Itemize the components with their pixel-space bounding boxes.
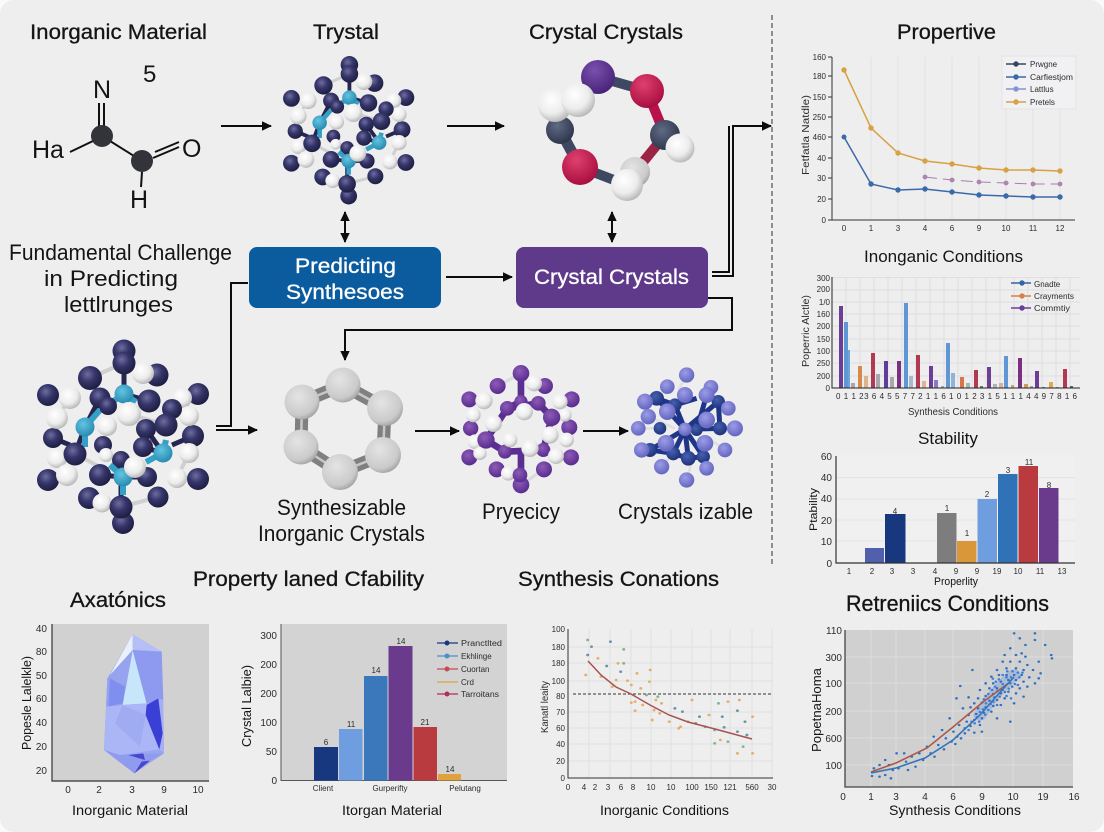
value labels: 11	[1025, 458, 1034, 467]
y axis labels: 110	[826, 626, 842, 637]
scatter points	[586, 640, 753, 753]
y axis labels: 60	[821, 452, 832, 463]
icon: ring molecule	[538, 60, 694, 201]
legend: Crd	[461, 678, 474, 687]
heading: Axatonics: Axatónics	[70, 589, 166, 612]
box: Crystal Crystals: Crystal Crystals	[534, 266, 689, 289]
x axis labels: 0 1 1 23 6 4 5 5 7 7 2 1 1 6 1 0 1 2 3 1 5 1 1 1 4 4 9 7 8 1 6	[836, 392, 1078, 401]
x axis labels	[842, 224, 1065, 233]
crystal shape	[104, 634, 164, 773]
x axis labels: 9	[954, 567, 959, 576]
y axis labels: 10	[821, 537, 832, 548]
icon: grey ring	[284, 368, 403, 490]
y axis labels	[552, 625, 566, 783]
title: Inorganic Material: Inorganic Material	[30, 21, 207, 44]
y axis labels: 160	[817, 310, 831, 319]
value labels	[324, 637, 455, 774]
x axis labels: 6	[950, 792, 956, 803]
legend: Prwgne	[1030, 60, 1058, 69]
y axis labels: 0	[822, 216, 827, 225]
heading: Synthesis Conations: Synthesis Conations	[518, 568, 719, 591]
label: Synthesizable Inorganic Crystals: Synthesizable	[277, 495, 406, 520]
x axis labels: 150	[704, 783, 718, 792]
x axis labels: 0	[566, 783, 571, 792]
x axis labels: 9	[975, 567, 980, 576]
x axis labels: 19	[1037, 792, 1049, 803]
arrow: ring to purple cluster	[415, 430, 459, 432]
x axis labels: 1	[868, 792, 874, 803]
y axis labels: 300	[260, 631, 277, 642]
x axis title: Properlity	[934, 576, 978, 588]
y axis labels: 20	[36, 742, 47, 753]
legend	[1011, 280, 1074, 313]
x axis labels: 16	[1068, 792, 1080, 803]
y axis labels: 60	[556, 724, 566, 733]
y axis labels: 600	[825, 734, 842, 745]
x axis labels: 2	[870, 567, 875, 576]
y axis labels: 200	[817, 372, 831, 381]
box: Predicting Synthesoes: Synthesoes	[286, 281, 404, 304]
x axis labels: 10	[192, 785, 204, 796]
bars	[865, 466, 1058, 563]
y axis labels: 100	[825, 679, 842, 690]
y axis labels	[821, 452, 832, 570]
y axis labels: 80	[556, 692, 566, 701]
arrow: double between trystal and blue box	[344, 212, 346, 242]
x axis labels: 10	[1002, 224, 1011, 233]
scatter chart: Retreniics Conditions	[809, 626, 1080, 818]
title: Stability: Stability	[918, 429, 978, 448]
value labels: 11	[347, 720, 356, 729]
x axis labels: 6	[950, 224, 955, 233]
y axis labels: 150	[817, 335, 831, 344]
y axis title: Kanatl leaity	[540, 681, 551, 733]
x axis labels: 9	[979, 792, 985, 803]
x axis labels: 2	[593, 783, 598, 792]
x axis labels: 2	[96, 785, 102, 796]
x axis title: Synthesis Conditions	[889, 802, 1021, 818]
heading: Retreniics Conditions: Retreniics Conditions	[846, 591, 1049, 616]
x axis labels: 9	[977, 224, 982, 233]
y axis labels: 180	[813, 72, 827, 81]
x axis labels: 30	[768, 783, 777, 792]
x axis title: Inorganic Conditions	[600, 802, 729, 818]
y axis labels: 100	[260, 718, 277, 729]
icon: large teal crystal cluster	[37, 340, 209, 534]
y axis labels: 50	[36, 671, 47, 682]
icon: skeletal molecule	[32, 76, 201, 214]
title: Crystal Crystals: Crystal Crystals	[529, 21, 683, 44]
x axis labels: 0	[65, 785, 71, 796]
y axis labels: 180	[552, 659, 566, 668]
value labels: 8	[1047, 481, 1052, 490]
label: Synthesizable Inorganic Crystals: Inorganic Crystals	[258, 521, 425, 546]
value labels: 14	[446, 765, 455, 774]
trend line: blue	[871, 677, 1014, 773]
arrow: purple box to Propertive	[712, 126, 771, 276]
icon: skeletal molecule: Ha	[32, 136, 64, 164]
x axis labels: 11	[1029, 224, 1038, 233]
x axis labels: 4	[922, 792, 928, 803]
x axis labels: 9	[161, 785, 167, 796]
x axis labels: 1	[847, 567, 852, 576]
value labels: 1	[945, 504, 950, 513]
title: Propertive: Propertive	[897, 21, 996, 44]
y axis labels: 200	[260, 660, 277, 671]
y axis labels: 40	[821, 494, 832, 505]
x axis labels: 3	[890, 567, 895, 576]
x axis title: Synthesis Conditions	[908, 407, 998, 418]
y axis labels: 40	[36, 718, 47, 729]
y axis title: Crystal Lalbie)	[239, 665, 254, 747]
value labels: 1	[965, 529, 970, 538]
x axis labels	[65, 785, 204, 796]
x axis labels	[840, 792, 1080, 803]
y axis labels: 40	[36, 624, 47, 635]
y axis labels: 20	[556, 757, 566, 766]
y axis labels: 60	[36, 694, 47, 705]
y axis labels: 40	[817, 154, 827, 163]
x axis labels: 560	[745, 783, 759, 792]
x axis labels: Pelutang	[449, 784, 481, 793]
y axis labels: 180	[552, 643, 566, 652]
y axis labels: 30	[817, 174, 827, 183]
legend	[1002, 56, 1076, 109]
legend: Crayments	[1034, 292, 1074, 301]
series: blue	[842, 134, 1063, 200]
y axis labels	[825, 626, 842, 772]
y axis title: Ptability	[808, 487, 820, 531]
y axis labels: 100	[552, 677, 566, 686]
line chart: Propertive	[801, 53, 1076, 233]
bar chart: Stability	[808, 452, 1075, 588]
arrow: left connector	[216, 283, 257, 430]
trend line	[588, 661, 752, 739]
arrow: purple cluster to blue cluster	[583, 430, 628, 432]
y axis labels: 20	[821, 516, 832, 527]
y axis labels: 200	[825, 707, 842, 718]
y axis labels: 150	[813, 93, 827, 102]
value labels: 14	[372, 666, 381, 675]
divider: dashed vertical	[771, 15, 773, 564]
y axis labels	[813, 53, 827, 225]
x axis labels: 3	[911, 567, 916, 576]
x axis labels: 3	[893, 792, 899, 803]
x axis labels: 10	[1014, 567, 1023, 576]
y axis labels: 460	[813, 133, 827, 142]
y axis labels: 200	[260, 689, 277, 700]
heading: Fundamental Challenge: in Predicting	[44, 266, 178, 291]
value labels: 14	[397, 637, 406, 646]
y axis labels: 0	[826, 559, 832, 570]
label: Pryecicy: Pryecicy	[482, 499, 560, 524]
y axis labels: 100	[817, 347, 831, 356]
x axis labels	[313, 784, 481, 793]
x axis labels: 12	[1056, 224, 1065, 233]
value labels: 6	[324, 738, 329, 747]
y axis title: Fetfatla Natdle)	[801, 95, 812, 175]
y axis labels: 300	[825, 653, 842, 664]
label: number 5: 5	[143, 61, 156, 88]
x axis labels: Gurperifty	[372, 784, 408, 793]
x axis labels: 100	[685, 783, 699, 792]
legend: Ekhlinge	[461, 652, 492, 661]
x axis labels: 0	[842, 224, 847, 233]
y axis labels: 200	[817, 285, 831, 294]
trend line: red	[871, 682, 1010, 772]
x axis labels: 11	[1036, 567, 1045, 576]
x axis labels: 13	[1058, 567, 1067, 576]
x axis labels: 4	[582, 783, 587, 792]
title: Inonganic Conditions: Inonganic Conditions	[864, 247, 1023, 266]
x axis title: Itorgan Material	[342, 802, 442, 818]
icon: skeletal molecule: O	[182, 135, 201, 163]
x axis labels: 3	[129, 785, 135, 796]
y axis labels	[817, 274, 831, 393]
value labels: 4	[893, 507, 898, 516]
series: pink dashed	[923, 175, 1062, 186]
y axis labels: 250	[813, 113, 827, 122]
x axis title: Inorganic Material	[72, 802, 188, 818]
value labels: 2	[985, 490, 990, 499]
point cloud	[872, 633, 1052, 778]
y axis labels: 50	[266, 747, 277, 758]
x axis labels: 4	[933, 567, 938, 576]
icon: blue crystal cluster	[631, 367, 743, 488]
legend	[437, 639, 502, 699]
scatter chart: Inorganic Conditions	[540, 625, 777, 818]
y axis labels: 1/0	[819, 298, 831, 307]
arrow: trystal to crystal	[447, 125, 504, 127]
box: Crystal Crystals	[516, 247, 708, 308]
bars	[314, 646, 461, 780]
x axis labels: 10	[647, 783, 656, 792]
arrow: double between crystal and purple box	[611, 212, 613, 242]
heading: Fundamental Challenge: Fundamental Challenge	[9, 240, 232, 265]
x axis labels	[566, 783, 777, 792]
y axis labels: 200	[817, 322, 831, 331]
y axis labels: 40	[821, 473, 832, 484]
y axis labels: 0	[271, 776, 277, 787]
threshold line	[573, 693, 773, 695]
arrow: purple box down to ring	[345, 298, 732, 360]
heading: Fundamental Challenge: lettlrunges	[64, 292, 173, 317]
legend: Gnadte	[1034, 280, 1061, 289]
y axis labels: 100	[825, 761, 842, 772]
bars	[839, 303, 1073, 388]
x axis labels: 19	[993, 567, 1002, 576]
y axis labels: 0	[561, 774, 566, 783]
bar chart: Crystal Lalbie	[239, 624, 507, 818]
series: orange	[841, 67, 1063, 174]
y axis labels: 70	[556, 708, 566, 717]
box: Predicting Synthesoes	[249, 247, 441, 308]
label: Synthesizable Inorganic Crystals	[258, 495, 425, 546]
x axis labels: 0	[840, 792, 846, 803]
legend: Tarroitans	[461, 690, 499, 699]
y axis title: PopetnaHoma	[809, 667, 824, 752]
y axis labels: 100	[552, 625, 566, 634]
x axis labels: 1	[869, 224, 874, 233]
bar chart: Inonganic Conditions	[801, 274, 1080, 418]
box: Predicting Synthesoes: Predicting	[295, 255, 396, 278]
legend: Pranctlted	[461, 639, 502, 648]
x axis labels: 10	[667, 783, 676, 792]
icon: purple crystal cluster	[461, 365, 580, 493]
legend: Lattlus	[1030, 85, 1054, 94]
x axis labels: 3	[606, 783, 611, 792]
icon: skeletal molecule: H	[130, 186, 148, 214]
y axis labels: 80	[36, 647, 47, 658]
value labels: 3	[1006, 466, 1011, 475]
label: Crystals izable: Crystals izable	[618, 499, 753, 524]
x axis labels: 121	[723, 783, 737, 792]
y axis title: Popesle Lalelkle)	[19, 656, 34, 750]
arrow: molecule to trystal	[221, 125, 271, 127]
x axis labels: Client	[313, 784, 334, 793]
value labels	[893, 458, 1052, 538]
y axis labels: 0	[826, 384, 831, 393]
y axis labels: 300	[817, 274, 831, 283]
x axis labels: 6	[619, 783, 624, 792]
y axis labels: 20	[36, 766, 47, 777]
arrow: blue box to purple box	[446, 276, 512, 278]
legend: Carfiestjom	[1030, 73, 1073, 82]
x axis labels: 10	[1007, 792, 1019, 803]
icon: skeletal molecule: N	[93, 76, 111, 104]
y axis title: Poperric Alctle)	[801, 295, 812, 367]
legend: Commtiy	[1034, 304, 1070, 313]
x axis labels: 3	[896, 224, 901, 233]
y axis labels: 20	[817, 195, 827, 204]
y axis labels	[260, 631, 277, 787]
y axis labels: 40	[556, 740, 566, 749]
y axis labels: 160	[813, 53, 827, 62]
x axis labels: 8	[631, 783, 636, 792]
chart: crystal facets	[19, 624, 209, 818]
x axis labels	[847, 567, 1067, 576]
x axis labels: 4	[923, 224, 928, 233]
y axis labels: 250	[817, 359, 831, 368]
value labels: 21	[421, 718, 430, 727]
heading: Fundamental Challenge	[9, 240, 232, 317]
legend: Pretels	[1030, 98, 1055, 107]
y axis labels	[36, 624, 47, 777]
legend: Cuortan	[461, 665, 489, 674]
heading: Property laned Cfability: Property laned Cfability	[193, 568, 425, 591]
title: Trystal: Trystal	[313, 21, 379, 44]
icon: teal crystal cluster	[283, 56, 414, 204]
